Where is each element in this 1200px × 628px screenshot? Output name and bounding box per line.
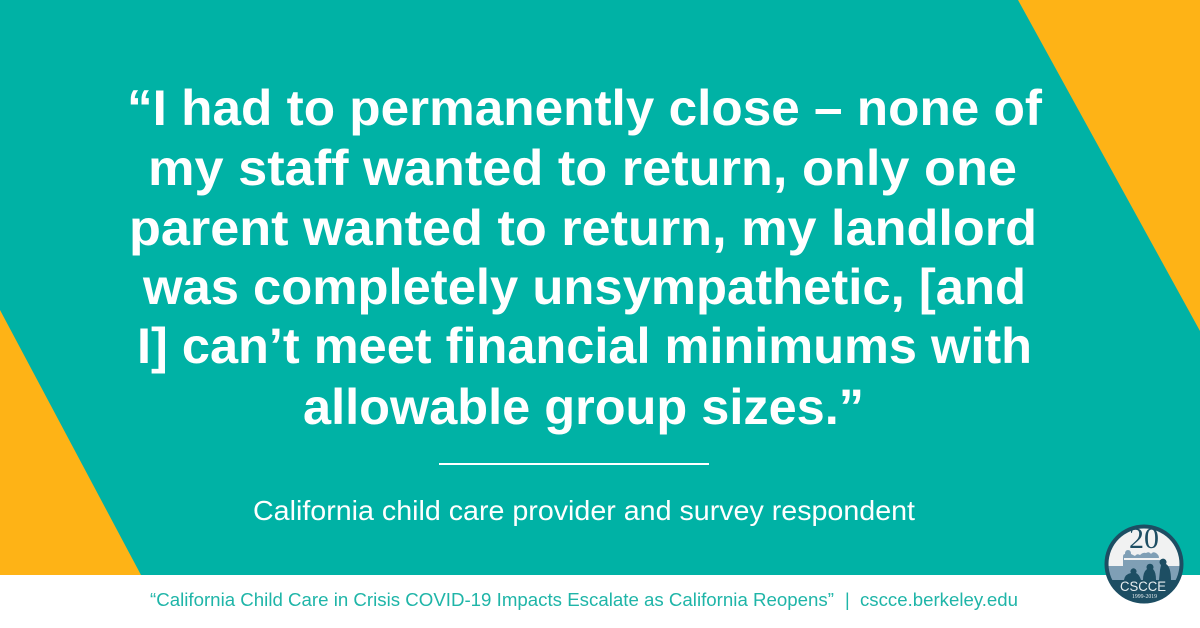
badge wordmark: CSCCE bbox=[1120, 579, 1166, 594]
quote text: “I had to permanently close – none of bbox=[127, 80, 1042, 136]
badge numeral: 20 bbox=[1129, 522, 1159, 555]
yellow corner shape: top right bbox=[1018, 0, 1200, 331]
yellow corner shape: bottom left bbox=[0, 310, 141, 575]
quote text: I] can’t meet financial minimums with bbox=[137, 318, 1032, 374]
footer citation: | bbox=[845, 590, 850, 610]
badge years: 1999-2019 bbox=[1132, 594, 1157, 600]
quote text: parent wanted to return, my landlord bbox=[129, 200, 1037, 256]
quote text: was completely unsympathetic, [and bbox=[142, 259, 1026, 315]
attribution: California child care provider and survey respondent bbox=[253, 495, 915, 526]
CSCCE 20th anniversary badge bbox=[1104, 522, 1184, 604]
footer citation: “California Child Care in Crisis COVID-19 Impacts Escalate as California Reopens” bbox=[150, 590, 834, 610]
silhouettes of children and caregiver bbox=[1124, 559, 1171, 580]
quote text: allowable group sizes.” bbox=[303, 379, 864, 435]
quote text: my staff wanted to return, only one bbox=[148, 140, 1017, 196]
quote text bbox=[127, 80, 1042, 435]
divider rule bbox=[439, 463, 709, 465]
footer citation: cscce.berkeley.edu bbox=[860, 590, 1018, 610]
